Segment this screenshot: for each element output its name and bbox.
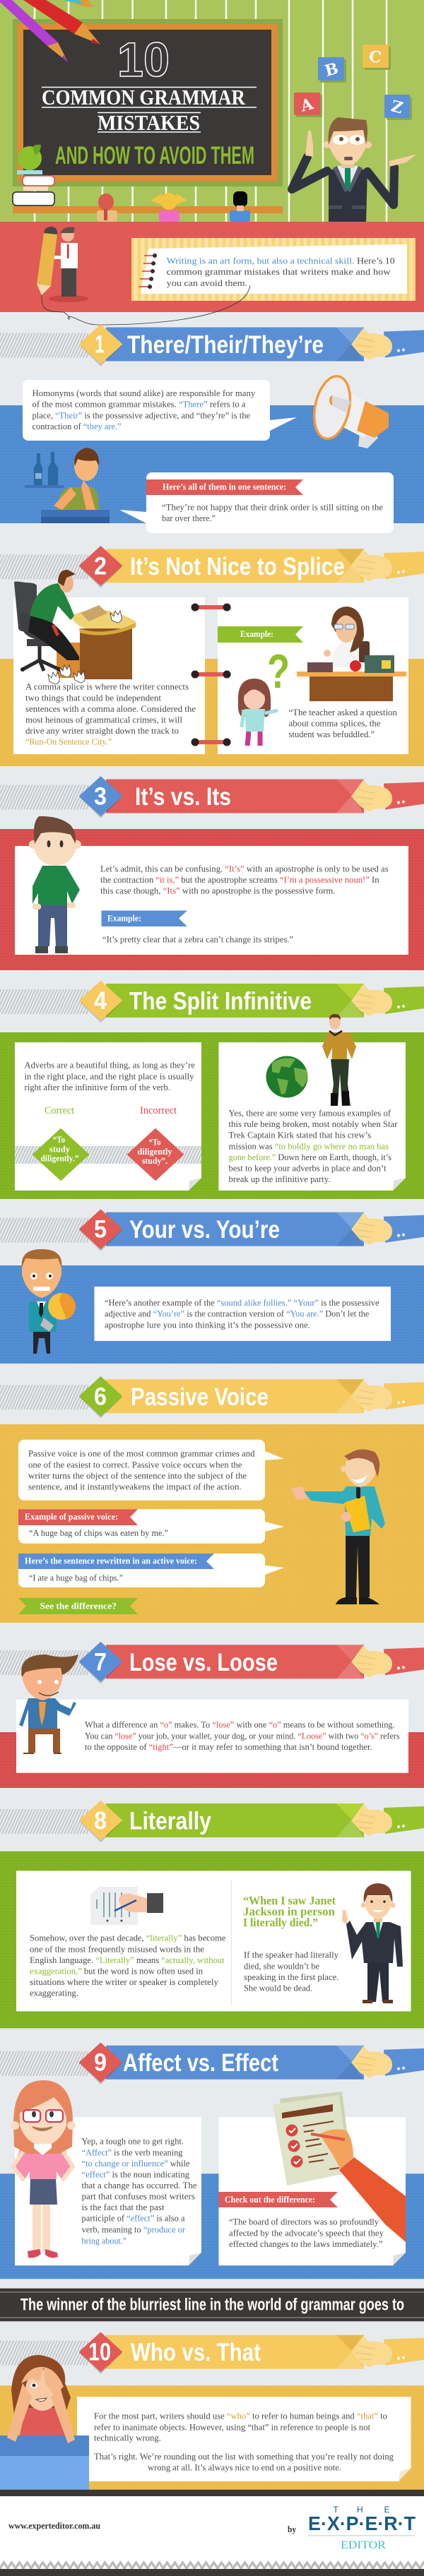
panel: example: Example: <box>240 628 273 639</box>
speech bubble: passive example: “A huge bag of chips was eaten by me.” <box>29 1527 168 1538</box>
pull quote: I literally died.” <box>243 1916 318 1929</box>
left text: one of the most frequently misused words in the <box>30 1943 204 1954</box>
speech bubble: one sentence: bar over there.” <box>162 513 216 523</box>
heading 9: 9 <box>94 2049 107 2077</box>
alphabet blocks: A <box>298 95 316 116</box>
card: apostrophe lure you into thinking it’s the possessive one. <box>105 1319 310 1330</box>
left text: English language. “Literally” means “actually, without <box>30 1955 225 1965</box>
panel: affect explanation: “to change or influence” while <box>82 2158 190 2169</box>
heading 9: Affect vs. Effect <box>123 2049 278 2077</box>
man in suit <box>342 1883 403 2003</box>
panel: comma splice: two things that could be independent <box>25 692 161 703</box>
panel: check out the difference: Check out the difference: <box>225 2194 315 2205</box>
diamond: correct: “To <box>53 1134 65 1145</box>
heading 7: Lose vs. Loose <box>129 1649 278 1676</box>
explanation text <box>100 863 389 896</box>
diamond: incorrect: study”. <box>142 1155 167 1166</box>
heading 8 <box>0 1801 424 1842</box>
panel: affect explanation: “Affect” is the verb meaning <box>82 2147 183 2157</box>
heading 10 <box>0 2333 424 2374</box>
panel: check out the difference <box>219 2117 406 2265</box>
diamond: correct: diligently.” <box>41 1153 79 1164</box>
heading 5: 5 <box>94 1216 107 1244</box>
speech bubble: active example <box>18 1554 284 1587</box>
speech bubble: place, “Their” is the possessive adjective, and “they’re” is the <box>33 410 250 420</box>
shelf <box>13 206 283 213</box>
panel: star trek: mission was “to boldly go where no man has <box>229 1140 389 1151</box>
intro card: common grammar mistakes that writers make and how <box>167 266 391 277</box>
teacher <box>292 117 417 222</box>
intro card: you can avoid them. <box>167 278 247 288</box>
heading 4 <box>0 982 424 1022</box>
heading 7 <box>0 1642 424 1683</box>
explanation text <box>85 1719 400 1752</box>
heading 3: 3 <box>94 782 107 811</box>
panel: star trek: this rule being broken, most notably when Star <box>229 1119 398 1129</box>
panel: check out the difference: affected by the advocate’s speech that they <box>229 2227 384 2238</box>
heading 3 <box>0 777 424 818</box>
panel: comma splice <box>13 597 205 754</box>
alphabet blocks <box>294 44 412 120</box>
panel: star trek: gone before.” Down here on Earth, though, it’s <box>229 1152 391 1162</box>
heading 1 <box>0 325 424 366</box>
heading 5: Your vs. You’re <box>129 1216 280 1244</box>
heading 9 <box>0 2044 424 2085</box>
pencils <box>0 0 100 62</box>
closing card <box>77 2397 411 2481</box>
heading 2: It’s Not Nice to Splice <box>130 553 345 580</box>
panel: adverbs: Incorrect <box>140 1105 177 1116</box>
heading 6 <box>0 1377 424 1418</box>
speech bubble: contraction of “they are.” <box>33 421 122 431</box>
closing card: technically wrong. <box>94 2433 161 2443</box>
closing card: For the most part, writers should use “who” to refer to human beings and “that” to <box>94 2411 387 2421</box>
card <box>95 1287 391 1341</box>
title: common grammar mistakes: COMMON GRAMMAR <box>42 85 246 109</box>
ribbon: see the difference: See the difference? <box>40 1600 117 1611</box>
person at bar <box>25 448 110 523</box>
panel: adverbs: Adverbs are a beautiful thing, as long as they’re <box>24 1060 195 1071</box>
panel: affect explanation: “effect” is the noun indicating <box>82 2169 189 2179</box>
checklist illustration <box>273 2092 406 2242</box>
icon: question mark: ? <box>267 645 290 698</box>
header: classroom <box>0 0 424 222</box>
heading 6: 6 <box>94 1383 107 1410</box>
speech bubble: one sentence: Here’s all of them in one sentence: <box>163 482 286 491</box>
icon: globe <box>266 1056 308 1097</box>
speech bubble: active example: “I ate a huge bag of chips.” <box>29 1573 123 1583</box>
pull quote: Jackson in person <box>243 1905 336 1918</box>
heading 3: It’s vs. Its <box>135 783 231 811</box>
man with light bulb <box>22 1249 76 1354</box>
panel: affect explanation: that a change has occurred. The <box>82 2180 197 2190</box>
boy in green sweater <box>29 816 81 953</box>
section 10 band <box>0 2385 424 2490</box>
girl <box>238 679 278 746</box>
panel: affect explanation: participle of “effect” is also a <box>82 2213 185 2224</box>
bottom zigzag <box>0 2560 424 2576</box>
right text: She would be dead. <box>244 1982 312 1993</box>
explanation text: What a difference an “o” makes. To “lose” with one “o” means to be without something. <box>85 1719 395 1730</box>
intro card <box>131 238 416 301</box>
notebook rings <box>195 607 227 742</box>
speech bubble: explanation: one of the easiest to correct. Passive voice occurs when the <box>28 1459 242 1469</box>
section 1 band <box>0 373 424 533</box>
panel: affect explanation: verb, meaning to “produce or <box>82 2224 186 2235</box>
section 8 band <box>0 1852 424 2028</box>
icon: megaphone <box>309 373 389 448</box>
section 3 band <box>0 829 424 970</box>
card: adjective and “You’re” is the contraction version of “You are.” Don’t let the <box>105 1308 370 1319</box>
heading 2: 2 <box>94 552 107 580</box>
panel: affect explanation: bring about.” <box>82 2235 126 2246</box>
heading 2 <box>0 547 424 588</box>
left text: exaggeration,” but the word is now often used in <box>30 1965 203 1976</box>
panel: check out the difference: “The board of directors was so profoundly <box>229 2217 379 2227</box>
panel: affect explanation: is the fact that the past <box>82 2202 165 2212</box>
panel: comma splice: drive any writer straight down the track to <box>25 725 179 736</box>
explanation text: the contraction “it is,” but the apostrophe screams “I’m a possessive noun!” In <box>100 874 379 885</box>
alphabet blocks: Z <box>389 97 405 118</box>
speech bubble <box>23 380 297 441</box>
pencil man <box>37 227 88 302</box>
panel: affect explanation <box>15 2117 201 2265</box>
subtitle: AND HOW TO AVOID THEM <box>55 142 254 169</box>
alphabet blocks: C <box>367 47 382 67</box>
books and apple <box>13 145 54 205</box>
logo: H <box>357 2505 363 2515</box>
heading 8: Literally <box>129 1808 211 1835</box>
speech bubble: of the most common grammar mistakes. “There” refers to a <box>33 399 246 410</box>
kid: black hair <box>230 191 250 222</box>
captain figure <box>322 1014 356 1106</box>
curly connecting line <box>42 285 250 325</box>
alphabet blocks: B <box>323 59 341 80</box>
heading 5 <box>0 1210 424 1251</box>
panel: example <box>218 597 408 754</box>
left text: exaggerating. <box>30 1988 78 1998</box>
speech bubble: explanation: sentence, and it instantlyweakens the impact of the action. <box>28 1481 242 1491</box>
panel: adverbs <box>15 1042 201 1191</box>
left text: Somehow, over the past decade, “literally” has become <box>30 1933 226 1943</box>
logo: EDITOR <box>341 2539 387 2551</box>
icon: hand writing on paper <box>90 1887 163 1925</box>
title: common grammar mistakes <box>42 85 257 135</box>
desk <box>0 2435 89 2490</box>
dark strip <box>0 2490 424 2496</box>
panel: example: about comma splices, the <box>288 717 381 728</box>
section 7 band <box>0 1700 424 1788</box>
speech bubble: Homonyms (words that sound alike) are responsible for many <box>33 388 256 398</box>
diamond: correct <box>33 1129 88 1180</box>
heading 6: Passive Voice <box>131 1383 269 1411</box>
panel: star trek: break up the infinitive party. <box>229 1174 331 1184</box>
man in blue shirt <box>19 1654 78 1754</box>
right text: speaking in the first place. <box>244 1972 339 1982</box>
kid: yellow hair <box>151 193 187 222</box>
diamond: correct: study <box>49 1144 70 1155</box>
right text: If the speaker had literally <box>244 1950 338 1960</box>
writer at desk <box>14 570 136 684</box>
title number 10: 10 <box>117 32 170 87</box>
closing card: wrong at all. It’s always nice to end on a positive note. <box>148 2462 341 2473</box>
panel: adverbs: in the right place, and the right place is usually <box>24 1071 194 1081</box>
panel: affect explanation: part that confuses most writers <box>82 2191 195 2202</box>
panel: comma splice: “Run-On Sentence City.” <box>25 737 112 747</box>
speech bubble: explanation: Passive voice is one of the most common grammar crimes and <box>28 1448 255 1459</box>
explanation text: to the opposite of “tight”—or it may refer to something that isn’t bound together. <box>85 1741 372 1752</box>
logo: T <box>334 2505 339 2515</box>
panel: check out the difference: effected changes to the laws immediately.” <box>229 2238 383 2249</box>
by label: by <box>288 2524 296 2534</box>
speech bubble: one sentence <box>119 472 394 533</box>
panel: comma splice: A comma splice is where the writer connects <box>25 681 189 692</box>
explanation text: You can “lose” your job, your wallet, your dog, or your mind. “Loose” with two “o’s” refers <box>85 1730 400 1741</box>
heading 1: 1 <box>95 330 105 359</box>
heading 1: There/Their/They’re <box>127 331 324 359</box>
website: www.experteditor.com.au <box>8 2520 100 2531</box>
ribbon: see the difference <box>18 1598 138 1614</box>
logo <box>307 2505 416 2551</box>
heading 4: The Split Infinitive <box>129 987 312 1015</box>
panel: star trek: Yes, there are some very famous examples of <box>229 1107 391 1118</box>
pull quote <box>243 1894 336 1929</box>
speech bubble: passive example <box>18 1509 284 1544</box>
card: “Here’s another example of the “sound alike follies.” “Your” is the possessive <box>105 1297 379 1308</box>
logo: E <box>384 2505 390 2515</box>
panel: affect explanation: Yep, a tough one to get right. <box>82 2136 184 2147</box>
section 5 band <box>0 1265 424 1364</box>
explanation text: Let’s admit, this can be confusing. “It’s” with an apostrophe is only to be used as <box>100 863 389 873</box>
example sentence: “It’s pretty clear that a zebra can’t change its stripes.” <box>102 934 293 945</box>
example ribbon <box>102 911 187 926</box>
heading 7: 7 <box>94 1648 107 1676</box>
pull quote: “When I saw Janet <box>243 1894 336 1907</box>
closing card: refer to inanimate objects. However, using “that” in reference to people is not <box>94 2421 370 2432</box>
panel: star trek <box>219 1042 406 1191</box>
speech bubble: explanation <box>18 1440 284 1501</box>
woman with glasses <box>11 2080 76 2258</box>
diamond: incorrect: “To <box>148 1137 161 1147</box>
man with folder <box>290 1449 385 1604</box>
panel: adverbs: right after the infinitive form of the verb. <box>24 1082 170 1092</box>
right text <box>244 1950 339 1993</box>
panel: comma splice: sentences with a comma alone. Considered the <box>25 703 196 714</box>
section 6 band <box>0 1424 424 2576</box>
diamond: incorrect <box>128 1129 183 1180</box>
example ribbon: Example: <box>107 912 141 924</box>
winner banner <box>0 2289 424 2321</box>
heading 10: Who vs. That <box>131 2339 261 2366</box>
left text: situations where the writer or speaker is completely <box>30 1976 218 1987</box>
panel: star trek: best to keep your adverbs in place and don’t <box>229 1162 387 1173</box>
chalkboard <box>13 19 283 186</box>
intro band <box>0 222 424 312</box>
closing card: That’s right. We’re rounding out the list with something that you’re really not doing <box>94 2451 394 2462</box>
panel: example: “The teacher asked a question <box>288 707 397 717</box>
panel: example: student was befuddled.” <box>288 729 375 739</box>
logo: E·X·P·E·R·T <box>308 2512 416 2534</box>
speech bubble: active example: Here’s the sentence rewritten in an active voice: <box>25 1555 197 1566</box>
speech bubble: explanation: writer turns the object of the sentence into the subject of the <box>28 1470 247 1481</box>
section 9 band <box>0 2117 424 2279</box>
intro card: Writing is an art form, but also a technical skill. Here’s 10 <box>167 256 395 266</box>
panel: adverbs: Correct <box>45 1105 74 1116</box>
heading 4: 4 <box>94 987 107 1015</box>
heading 10: 10 <box>88 2339 111 2366</box>
speech bubble: one sentence: “They’re not happy that their drink order is still sitting on the <box>162 501 383 513</box>
title: common grammar mistakes: MISTAKES <box>98 110 200 135</box>
heading 8: 8 <box>94 1807 107 1835</box>
section 2 band <box>0 597 424 766</box>
footer <box>0 2496 424 2576</box>
left text <box>30 1933 226 1998</box>
panel: comma splice: most heinous of grammatical crimes, it will <box>25 715 182 725</box>
diamond: incorrect: diligently <box>137 1146 172 1157</box>
frustrated woman <box>7 2355 75 2443</box>
panel: star trek: Trek Captain Kirk stated that his crew’s <box>229 1130 371 1140</box>
right text: died, she wouldn’t be <box>244 1960 319 1971</box>
explanation text: this case though, “Its” with no apostrophe is the possessive form. <box>100 886 335 896</box>
kid: red hair <box>97 193 117 222</box>
teacher at desk <box>297 607 406 701</box>
section 4 band <box>0 1032 424 1199</box>
speech bubble: passive example: Example of passive voice: <box>25 1511 118 1522</box>
